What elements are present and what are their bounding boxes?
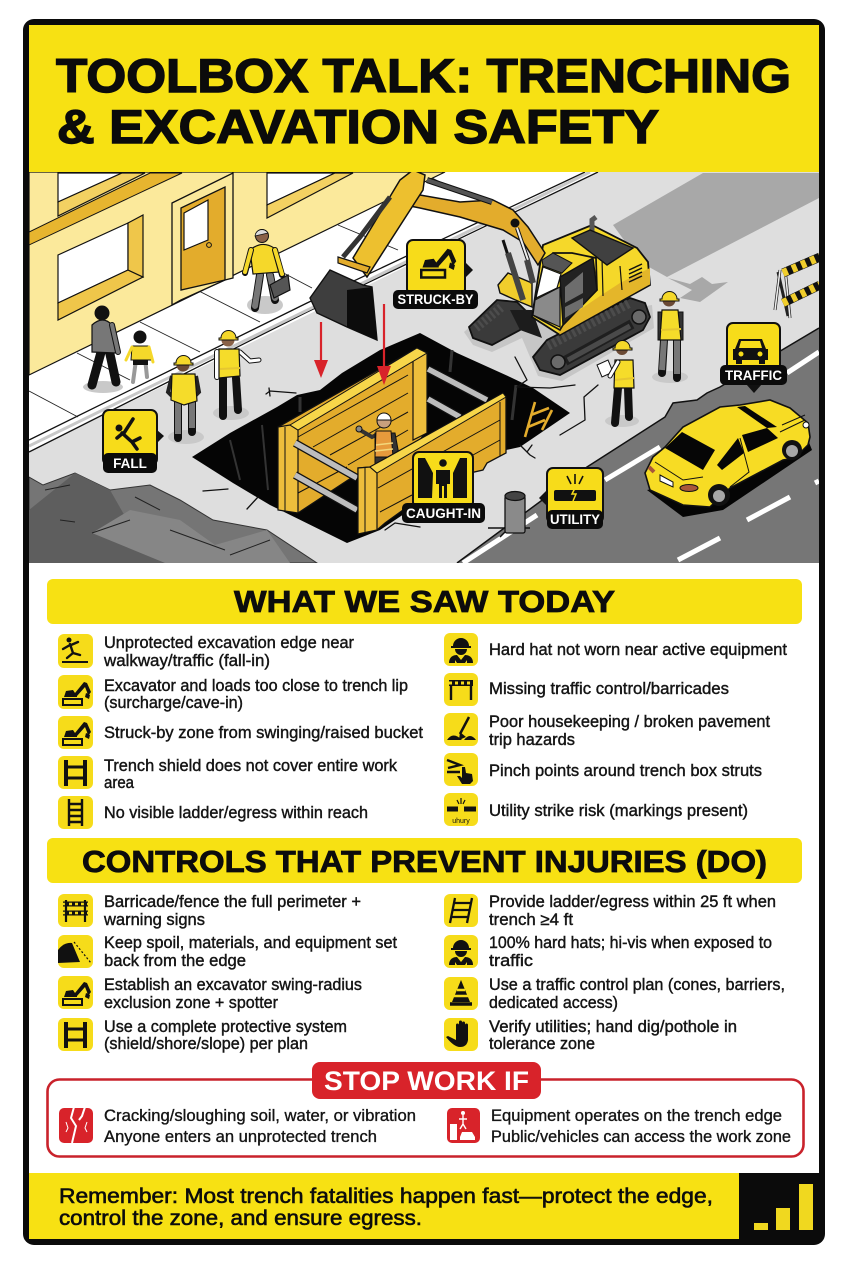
item: trench shield: area (104, 774, 135, 792)
footer text: Remember: Most trench fatalities happen fast—protect the edge, (59, 1185, 713, 1208)
item: verify utilities: Verify utilities; hand dig/pothole in (489, 1018, 737, 1036)
item: spoil set back (58, 934, 397, 970)
item: barricade: warning signs (103, 911, 205, 929)
item: excavator too close: (surcharge/cave-in) (104, 694, 243, 712)
building (29, 172, 445, 375)
hazard tag: traffic (720, 323, 787, 393)
item: no ladder: No visible ladder/egress within reach (104, 804, 368, 822)
item: swing radius (58, 976, 362, 1012)
back wall (278, 348, 427, 513)
spoil pile (29, 473, 317, 563)
worker with hands on hips (168, 356, 204, 444)
stop conditions right (491, 1107, 791, 1146)
pedestrian: adult (83, 306, 123, 393)
lower window (58, 215, 143, 320)
item: verify utilities: tolerance zone (489, 1035, 595, 1053)
cab (533, 253, 597, 330)
panel: stop work if (48, 1062, 804, 1156)
hazard tag: caught-in: CAUGHT-IN (406, 506, 481, 521)
pavement crack shadow (668, 277, 728, 302)
item: traffic control: Missing traffic control/barricades (489, 680, 729, 698)
upper window right (267, 173, 353, 218)
engine cover (572, 230, 633, 265)
icon: cracked ground (59, 1107, 93, 1143)
stop work heading (312, 1062, 541, 1099)
utility marker pipe (488, 492, 530, 537)
scene illustration (29, 170, 820, 563)
worker standing right (652, 292, 688, 383)
item: trench shield (58, 756, 398, 792)
pedestrian: man with briefcase (245, 230, 290, 314)
upper window left (58, 173, 145, 216)
item: utility strike: uhury (452, 818, 470, 825)
exhaust (592, 217, 596, 232)
item: hard hats: 100% hard hats; hi-vis when exposed to (489, 934, 772, 952)
icon: signal bars (739, 1173, 819, 1239)
item: spoil set back: back from the edge (104, 952, 246, 970)
ground cracks (203, 357, 598, 530)
housing (532, 225, 650, 335)
stop work heading: STOP WORK IF (324, 1066, 529, 1096)
hazard tag: traffic: TRAFFIC (725, 368, 782, 383)
item: struck-by zone: Struck-by zone from swinging/raised bucket (104, 724, 423, 742)
item: no ladder (58, 796, 368, 829)
panel: controls that prevent injuries (47, 838, 802, 1053)
stop conditions left (104, 1107, 416, 1146)
counterweight front (498, 273, 532, 307)
item: housekeeping: Poor housekeeping / broken pavement (489, 713, 770, 731)
item: housekeeping (444, 713, 770, 749)
title text: TOOLBOX TALK: TRENCHING (56, 49, 791, 102)
rear track (469, 300, 532, 345)
item: ladder: Provide ladder/egress within 25 ft when (489, 893, 776, 911)
section heading (47, 838, 802, 883)
rear struts (428, 369, 487, 417)
panel: what we saw today (47, 579, 802, 829)
item: traffic plan (444, 976, 785, 1012)
hazard tag: fall: FALL (113, 456, 147, 471)
sidewalk (29, 172, 598, 452)
car (645, 400, 812, 517)
item: housekeeping: trip hazards (489, 731, 575, 749)
item: unprotected edge (58, 634, 354, 670)
door (172, 173, 233, 305)
item: pinch points (444, 753, 762, 786)
item: pinch points: Pinch points around trench box struts (489, 762, 762, 780)
item: hard hats: traffic (489, 952, 533, 970)
title text (56, 49, 791, 153)
front track (533, 298, 650, 375)
item: traffic plan: dedicated access) (489, 994, 618, 1012)
section heading (47, 579, 802, 624)
item: utility strike (444, 793, 748, 826)
footer text: control the zone, and ensure egress. (59, 1207, 422, 1230)
item: utility strike: Utility strike risk (markings present) (489, 802, 748, 820)
ladder in trench (525, 402, 552, 437)
worker in trench (356, 413, 399, 465)
title banner (29, 25, 819, 172)
red hazard arrows (314, 304, 391, 385)
hazard tag: fall (103, 410, 164, 473)
hazard tag: utility: UTILITY (550, 512, 600, 527)
ground (29, 172, 819, 563)
item: hard hat (444, 633, 787, 666)
stick (353, 170, 425, 277)
worker pointing (213, 331, 259, 420)
road (457, 328, 819, 563)
item: protective system: Use a complete protective system (104, 1018, 347, 1036)
hazard tag: utility (539, 468, 603, 529)
stop conditions right: Equipment operates on the trench edge (491, 1107, 782, 1125)
item: unprotected edge: walkway/traffic (fall-in) (103, 652, 270, 670)
section heading: WHAT WE SAW TODAY (234, 584, 615, 619)
item: excavator too close (58, 675, 408, 712)
stop conditions left: Anyone enters an unprotected trench (104, 1128, 377, 1146)
barricade (775, 257, 820, 318)
item: unprotected edge: Unprotected excavation edge near (104, 634, 354, 652)
item: traffic control (444, 673, 729, 706)
front struts (295, 443, 357, 510)
section heading: CONTROLS THAT PREVENT INJURIES (DO) (82, 844, 767, 879)
stop conditions left: Cracking/sloughing soil, water, or vibration (104, 1107, 416, 1125)
item: excavator too close: Excavator and loads too close to trench lip (104, 677, 408, 695)
pedestrian: child (126, 330, 153, 382)
item: spoil set back: Keep spoil, materials, and equipment set (104, 934, 397, 952)
item: barricade: Barricade/fence the full perimeter + (104, 893, 361, 911)
excavator (310, 170, 654, 381)
footer banner (29, 1173, 819, 1239)
footer text (59, 1185, 713, 1230)
item: traffic plan: Use a traffic control plan (cones, barriers, (489, 976, 785, 994)
hazard tag: caught-in (402, 452, 485, 523)
bucket linkage (338, 257, 370, 273)
front wall (358, 393, 506, 534)
title text: & EXCAVATION SAFETY (57, 100, 659, 153)
boom cylinders (427, 180, 533, 300)
item: hard hat: Hard hat not worn near active equipment (489, 641, 787, 659)
item: protective system (58, 1018, 347, 1053)
item: ladder: trench ≥4 ft (489, 911, 573, 929)
item: hard hats (444, 934, 772, 970)
item: ladder (444, 893, 776, 929)
item: struck-by zone (58, 716, 423, 749)
item: trench shield: Trench shield does not cover entire work (104, 757, 398, 775)
item: swing radius: Establish an excavator swing-radius (104, 976, 362, 994)
worker with clipboard (597, 340, 639, 427)
building shadow band (613, 173, 819, 277)
trench shield box (278, 348, 506, 534)
trench hole (192, 333, 570, 543)
hazard tag: struck-by (393, 240, 478, 309)
icon: public and vehicle (447, 1108, 480, 1143)
item: verify utilities (444, 1018, 737, 1053)
item: protective system: (shield/shore/slope) per plan (104, 1035, 308, 1053)
item: barricade (58, 893, 361, 929)
engine vents (629, 264, 642, 282)
hazard tag: struck-by: STRUCK-BY (398, 292, 474, 307)
stop conditions right: Public/vehicles can access the work zone (491, 1128, 791, 1146)
item: swing radius: exclusion zone + spotter (104, 994, 278, 1012)
boom (410, 195, 545, 265)
bucket (310, 270, 377, 340)
